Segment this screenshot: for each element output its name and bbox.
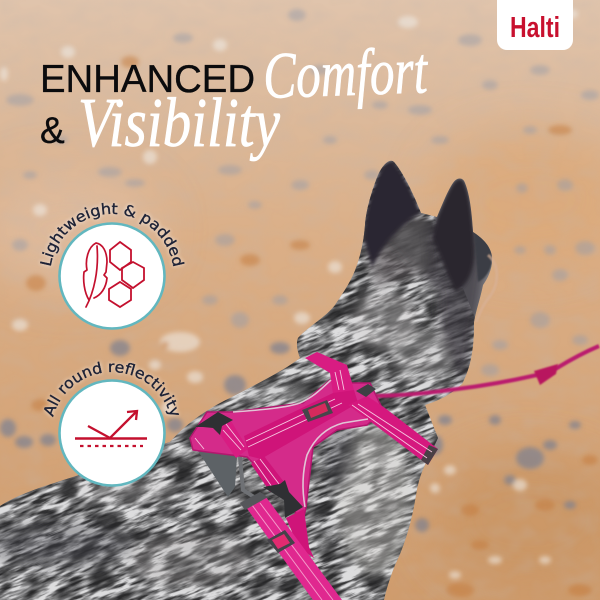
padded top strap xyxy=(244,390,358,459)
heading: ENHANCED: ENHANCED xyxy=(40,58,255,101)
right ear xyxy=(432,178,474,292)
badge: lightweight and padded xyxy=(39,202,186,330)
mesh panel xyxy=(190,380,383,522)
logo badge xyxy=(497,0,573,50)
leash going to the right xyxy=(368,346,599,396)
metal clip xyxy=(240,457,254,497)
tag inner xyxy=(308,403,328,418)
heading: ampersand: & xyxy=(40,110,65,151)
photo: dog seen from behind xyxy=(0,160,498,600)
reflective piping xyxy=(233,380,368,507)
left shoulder strap xyxy=(212,421,248,458)
curved label: Lightweight & padded xyxy=(39,202,186,268)
front buckle xyxy=(263,480,303,518)
neck clip xyxy=(356,384,376,397)
fur texture xyxy=(0,160,475,600)
left ear xyxy=(364,161,421,268)
icon: hexagons xyxy=(109,242,144,307)
icon: reflection arrow xyxy=(75,411,147,446)
chest strap xyxy=(348,396,438,465)
lead attached to the harness xyxy=(240,492,342,600)
heading: Comfort script: Comfort xyxy=(262,34,430,113)
curved label: All round reflectivity xyxy=(42,360,180,418)
grey back panel xyxy=(198,451,237,497)
leash blurred loop xyxy=(534,364,558,385)
lower strap xyxy=(251,456,284,492)
harness xyxy=(190,352,438,558)
muzzle xyxy=(474,230,492,282)
chest strap end xyxy=(421,445,438,465)
whiskers xyxy=(476,255,497,322)
top buckle xyxy=(195,412,233,435)
lead tag xyxy=(267,530,295,553)
neck strap xyxy=(305,352,354,394)
lead tag inner xyxy=(272,534,290,549)
icon: feather xyxy=(84,243,107,307)
stitching xyxy=(195,370,432,487)
badge: all round reflectivity xyxy=(42,360,180,487)
heading: Visibility script: Visibility xyxy=(78,85,281,162)
lead clasp xyxy=(240,492,268,510)
harness tag xyxy=(302,400,333,422)
title xyxy=(40,34,430,162)
belly strap xyxy=(286,509,314,558)
logo wordmark: Halti xyxy=(510,12,560,44)
